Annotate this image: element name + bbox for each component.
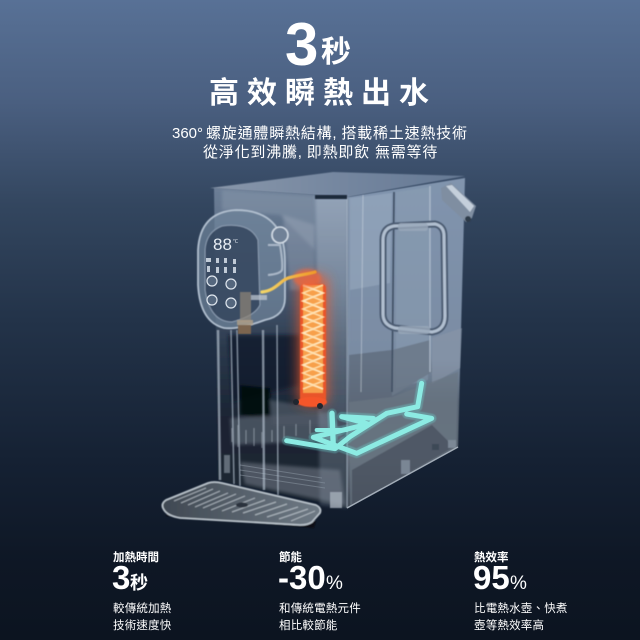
stat: thermal efficiency: 比電熱水壺、快煮 (474, 602, 568, 615)
vertical tubes (218, 197, 347, 508)
upper heater glow (293, 269, 321, 287)
water tank details (349, 186, 462, 506)
title (209, 11, 437, 110)
machinery detail speckle (232, 420, 310, 448)
stat: thermal efficiency: 熱效率 (474, 550, 509, 564)
central column (315, 196, 348, 508)
stat: energy saving: 和傳統電熱元件 (279, 601, 361, 615)
headline number: 3 (285, 11, 318, 78)
dispenser body: right face (347, 178, 465, 508)
description text (172, 125, 468, 161)
stat: heating time: 加熱時間 (113, 550, 159, 564)
stat: energy saving: % (326, 573, 343, 594)
control panel housing (198, 210, 288, 328)
stat: thermal efficiency: % (510, 573, 527, 594)
stat: thermal efficiency (473, 550, 568, 632)
subtitle: 高效瞬熱出水 (209, 77, 437, 110)
stat: energy saving (278, 550, 361, 632)
stat: energy saving: 節能 (279, 550, 302, 564)
column cap (315, 195, 347, 199)
stat: heating time: 技術速度快 (113, 618, 172, 632)
cyan water pipes (287, 383, 432, 453)
drip tray (162, 482, 320, 528)
pipe lines (287, 383, 432, 453)
stat: heating time: 秒 (130, 573, 148, 593)
stat: thermal efficiency: 95 (473, 559, 510, 596)
display digits: 88 (213, 235, 232, 254)
water dispenser illustration (162, 172, 476, 528)
description text: 搭載稀土速熱技術 (341, 125, 468, 142)
heater glow (298, 275, 328, 405)
description text: 從淨化到沸騰, 即熱即飲 無需等待 (203, 143, 438, 161)
stat: energy saving: -30 (278, 559, 326, 596)
headline unit: 秒 (321, 36, 351, 69)
yellow heating pipe (262, 272, 315, 292)
description text: 360° (172, 125, 203, 142)
dispenser body: lid (210, 172, 465, 197)
vent ribs (240, 465, 325, 488)
bottom edge highlight (347, 447, 458, 508)
stat: heating time: 3 (112, 559, 130, 596)
dispensing nozzle (237, 292, 267, 334)
dispenser body: front face (214, 188, 348, 508)
panel indicators (206, 258, 236, 273)
stat: heating time (112, 550, 172, 632)
base feet and details (224, 440, 456, 508)
stat: energy saving: 相比較節能 (279, 618, 338, 632)
heating coil (293, 284, 327, 409)
stat: heating time: 較傳統加熱 (113, 601, 172, 615)
description text: 螺旋通體瞬熱結構, (206, 125, 337, 142)
tank handle (383, 223, 445, 334)
pipe glow (287, 383, 432, 453)
spout at top right (441, 183, 476, 222)
internal dark structure (222, 190, 345, 505)
stat: thermal efficiency: 壺等熱效率高 (474, 618, 544, 632)
panel round buttons (207, 276, 236, 308)
display digits: ℃ (233, 239, 238, 245)
